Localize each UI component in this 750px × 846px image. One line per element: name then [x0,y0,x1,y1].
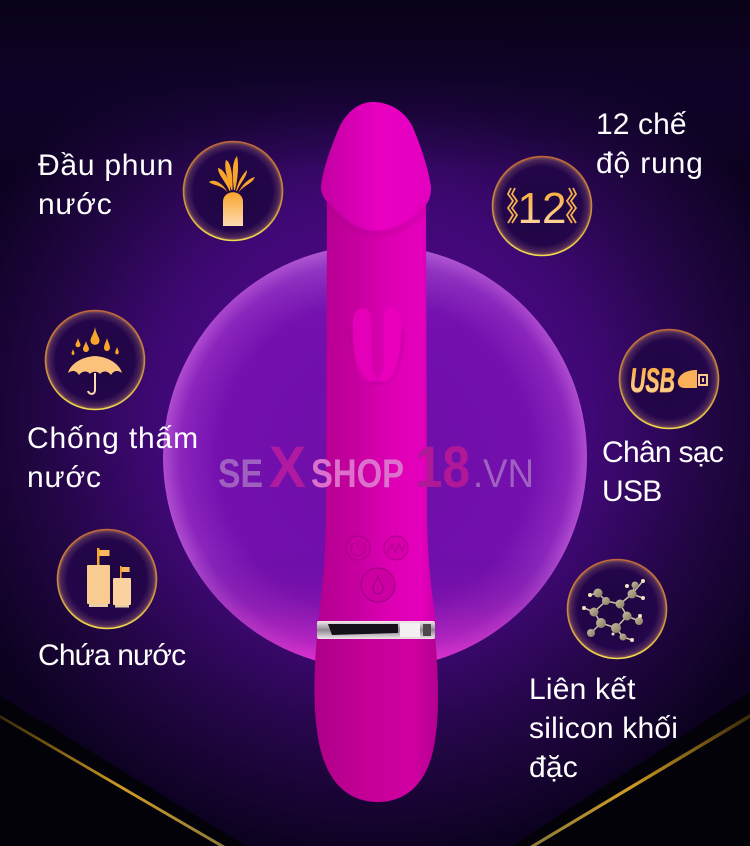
watermark: se: SE [218,452,263,496]
watermark: 18: 18 [415,435,470,500]
metal ring [317,621,435,639]
icon button: 12 modes [492,156,592,256]
corner: bottom right with gold line [512,692,750,846]
label: USB charging: Chân sạc [602,436,723,469]
product lower handle [314,636,438,802]
button: power [346,536,370,560]
label: USB charging [602,436,724,508]
label: waterproof: Chống thấm [27,422,199,455]
label: spray head: nước [38,188,112,221]
label: 12 modes [596,108,704,180]
watermark: shop: SHOP [311,452,404,496]
label: 12 modes: 12 chế [596,108,687,141]
button: mode [384,536,408,560]
product control buttons [346,536,408,602]
icon button: water spray [184,142,282,240]
icon label: USB: USB [630,362,675,400]
watermark: X: X [269,435,306,500]
product silhouette [314,102,438,802]
label: water tank: Chứa nước [38,639,185,672]
product shaft [318,195,436,624]
corner: bottom left with gold line [0,696,246,846]
label: spray head [38,149,174,221]
label: waterproof: nước [27,461,102,494]
label: solid silicone: Liên kết [529,673,636,706]
watermark [218,435,534,500]
icon button: waterproof umbrella [46,310,144,410]
label: USB charging: USB [602,475,662,508]
label: waterproof [27,422,199,494]
product side arms [352,308,403,383]
icon button: water tanks [58,530,156,628]
icon button: silicone molecule [568,560,666,658]
button: water [361,568,395,602]
label: 12 modes: độ rung [596,147,704,180]
label: solid silicone [529,673,678,784]
purple disc [163,245,587,669]
label: solid silicone: đặc [529,751,578,784]
label: spray head: Đầu phun [38,149,174,182]
icon label: 12: 12 [518,184,566,233]
product top [321,102,431,231]
label: solid silicone: silicon khối [529,712,678,745]
icon button: USB [620,330,718,428]
watermark: .vn: .VN [473,452,534,496]
